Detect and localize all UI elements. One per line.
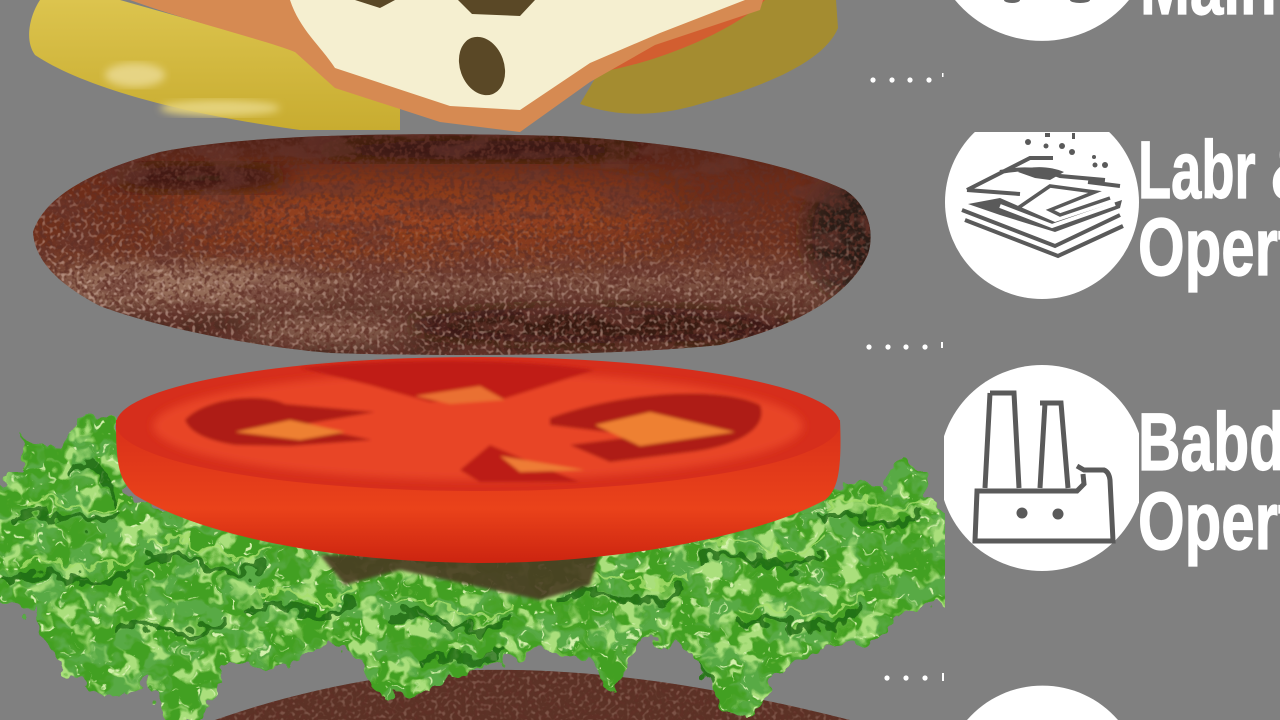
icon: factory [939,365,1145,571]
tomato inner pattern [153,361,803,482]
leader dots 1 [870,73,944,83]
beef patty [33,134,871,355]
icon: bottom circle [967,686,1118,720]
icon: layered lasagna [945,132,1139,299]
cheese inclusions [355,0,535,102]
lettuce ruffles [10,463,925,680]
leader dots 2 [866,342,943,350]
lettuce [0,405,960,720]
tomato slice [116,357,840,563]
right pickle [580,0,838,114]
meat under tomato [320,552,600,600]
cheese slice [130,0,763,132]
label: labor and operations [1138,125,1280,293]
leader dots 3 [884,673,944,681]
burger stack illustration [0,0,960,720]
left pickle [29,0,400,130]
tomato sliver under cheese [596,0,765,72]
bottom patty [215,668,850,720]
icon: maintenance circle [955,0,1129,41]
label: baseline operations [1138,397,1280,567]
